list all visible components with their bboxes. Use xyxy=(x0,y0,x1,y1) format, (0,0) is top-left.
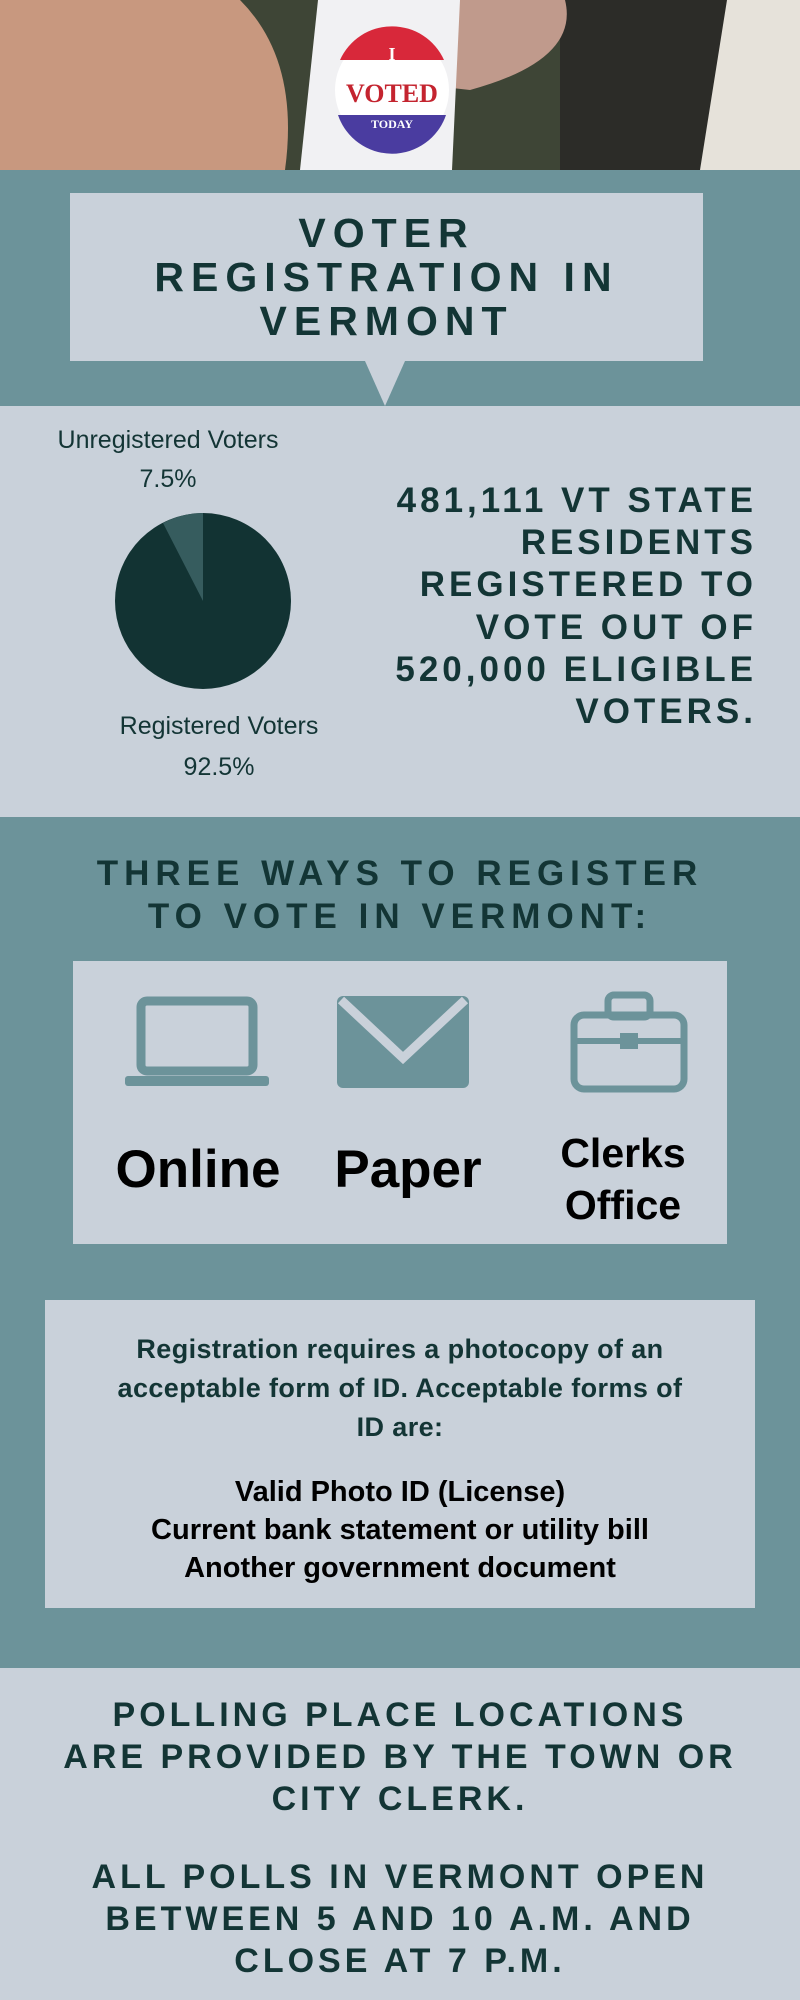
stat text: VOTE OUT OF xyxy=(476,608,757,647)
photo: I voted sticker: VOTED xyxy=(346,79,438,108)
icon: laptop xyxy=(125,996,269,1086)
polling info text: ARE PROVIDED BY THE TOWN OR xyxy=(63,1738,737,1776)
title box: VERMONT xyxy=(260,298,514,344)
polling info text: CLOSE AT 7 P.M. xyxy=(234,1942,566,1980)
stat text: 481,111 VT STATE xyxy=(397,481,757,520)
photo: I voted sticker: TODAY xyxy=(371,117,413,131)
polling info text xyxy=(63,1696,737,1980)
panel: ID requirements: Current bank statement or utility bill xyxy=(151,1514,649,1546)
pie labels: Unregistered Voters xyxy=(58,426,278,454)
heading: three ways: TO VOTE IN VERMONT: xyxy=(148,897,652,936)
stat text: RESIDENTS xyxy=(521,523,757,562)
panel: ways xyxy=(73,961,727,1244)
panel: ID requirements: Valid Photo ID (License) xyxy=(235,1476,565,1508)
title box: REGISTRATION IN xyxy=(154,254,619,300)
panel: ID requirements: ID are: xyxy=(357,1412,443,1442)
pie labels: 7.5% xyxy=(140,465,196,493)
polling info text: ALL POLLS IN VERMONT OPEN xyxy=(92,1858,708,1896)
panel: ways: Clerks xyxy=(560,1130,686,1176)
polling info text: BETWEEN 5 AND 10 A.M. AND xyxy=(105,1900,695,1938)
labels: Online xyxy=(116,1140,280,1199)
teal section xyxy=(0,817,800,1668)
teal header band xyxy=(0,170,800,406)
icon: briefcase xyxy=(570,992,688,1092)
photo: I voted sticker xyxy=(0,0,800,170)
heading: three ways: THREE WAYS TO REGISTER xyxy=(97,854,703,893)
title box xyxy=(70,193,703,361)
stat text: VOTERS. xyxy=(575,692,757,731)
stat text: REGISTERED TO xyxy=(420,565,757,604)
stat text: 520,000 ELIGIBLE xyxy=(395,650,757,689)
pointer xyxy=(365,361,405,406)
icon: envelope xyxy=(337,996,469,1088)
title box: VOTER xyxy=(298,210,475,256)
panel: ways: Office xyxy=(565,1182,681,1228)
pie chart xyxy=(58,426,318,781)
pie labels: 92.5% xyxy=(184,753,254,781)
panel: ID requirements: Another government document xyxy=(184,1552,616,1584)
panel: ID requirements xyxy=(45,1300,755,1608)
panel: ID requirements: Registration requires a photocopy of an xyxy=(136,1334,664,1364)
polling info text: POLLING PLACE LOCATIONS xyxy=(113,1696,687,1734)
panel: ways: Paper xyxy=(334,1140,482,1199)
pie labels xyxy=(58,426,318,781)
heading: three ways xyxy=(97,854,703,936)
pie labels: Registered Voters xyxy=(120,712,318,740)
polling info text: CITY CLERK. xyxy=(272,1780,528,1818)
stat text xyxy=(395,481,757,731)
panel: ID requirements: acceptable form of ID. Acceptable forms of xyxy=(118,1373,682,1403)
photo: I voted sticker: I xyxy=(388,44,396,64)
